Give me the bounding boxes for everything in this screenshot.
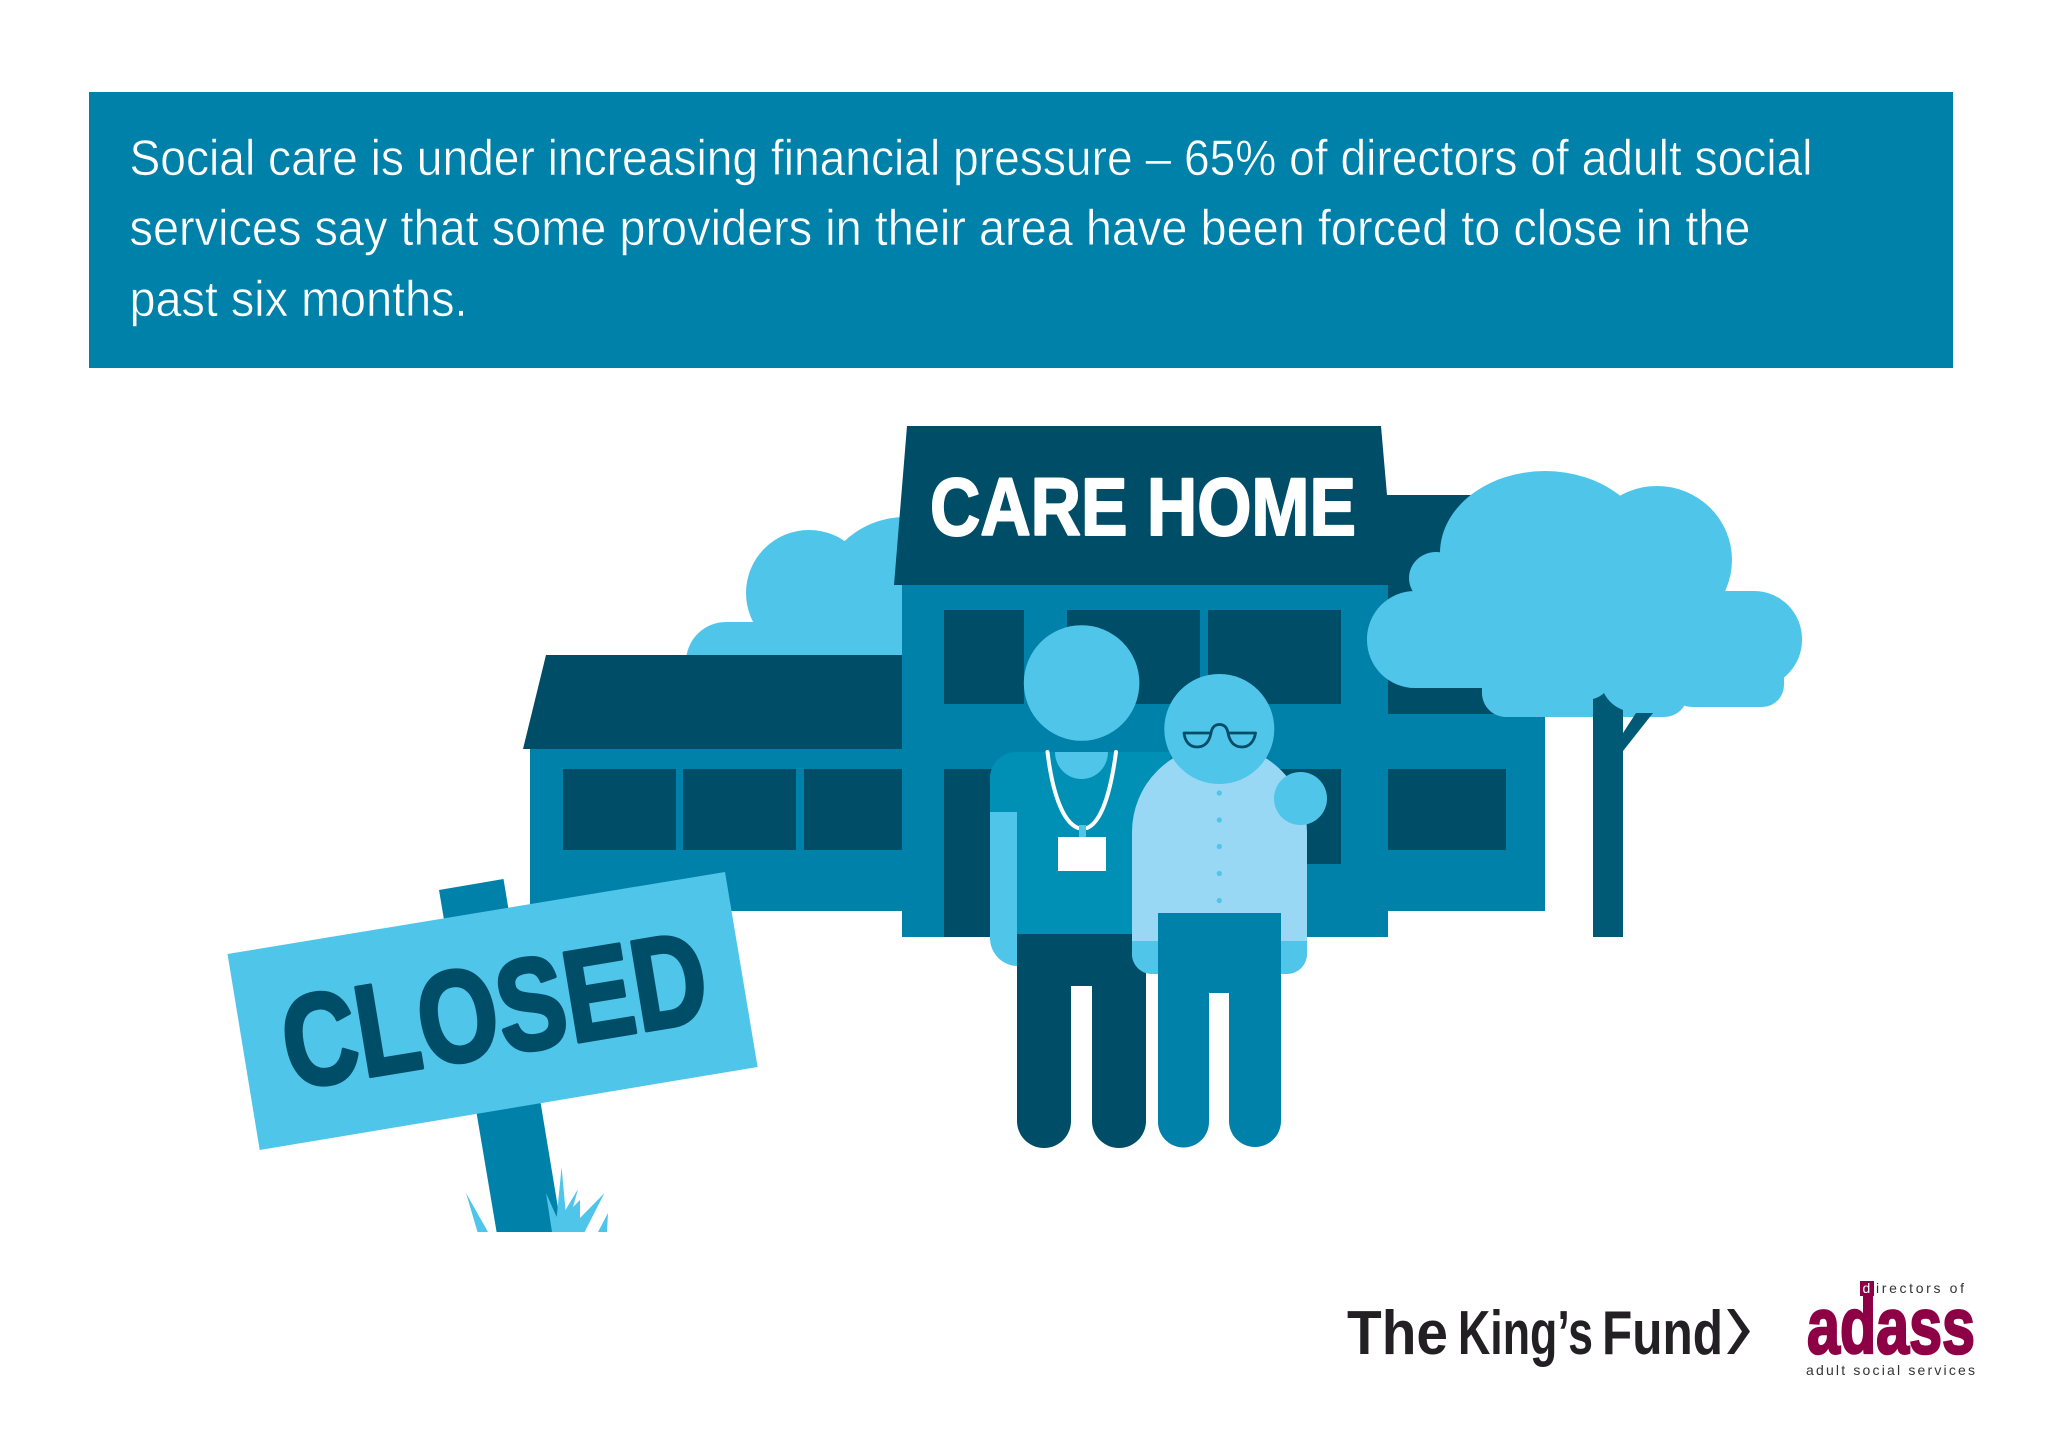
roof sign: CARE HOME (930, 462, 1356, 553)
worker arm (990, 812, 1017, 966)
logo: The King's Fund (1347, 1299, 1750, 1368)
worker neck (1055, 752, 1108, 779)
person shirt buttons (1217, 790, 1222, 903)
left wing (523, 655, 902, 911)
grass (466, 1167, 608, 1232)
text: headline statement: Social care is under increasing financial pressure – 65% of directors of adult social (130, 130, 1812, 186)
text: headline statement: services say that some providers in their area have been forced to close in the (130, 200, 1750, 256)
panel: headline banner (89, 92, 1953, 368)
logo: adass: adult social services (1806, 1362, 1975, 1378)
logo: adass (1806, 1280, 1975, 1378)
figure: older person (1132, 674, 1327, 1148)
illustration: care home building (523, 426, 1545, 937)
tree canopy (1367, 471, 1802, 717)
sign post (439, 879, 562, 1232)
worker legs (1017, 934, 1146, 1148)
text: headline statement (130, 130, 1812, 327)
sign board (228, 872, 758, 1150)
person trousers (1158, 913, 1281, 1148)
logo: The King's Fund: Fund (1602, 1299, 1723, 1368)
worker torso (990, 752, 1170, 934)
text: headline statement: past six months. (130, 271, 468, 327)
person glasses (1184, 724, 1256, 747)
person head (1164, 674, 1274, 784)
worker head (1024, 625, 1139, 741)
figure: care worker (990, 625, 1170, 1148)
sign text: CLOSED (271, 903, 717, 1117)
icon: cloud behind building (686, 517, 993, 702)
worker lanyard (1048, 752, 1116, 871)
icon: closed sign (228, 872, 758, 1232)
roof sign (894, 426, 1394, 585)
tree trunk (1593, 693, 1653, 937)
logo: adass: adass (1807, 1281, 1975, 1370)
main block (902, 585, 1388, 937)
logo: The King's Fund: The (1347, 1299, 1448, 1368)
right wing (1387, 495, 1545, 911)
logo: adass: d (1862, 1280, 1870, 1296)
person cuffs (1132, 941, 1307, 974)
person shirt (1132, 745, 1307, 974)
worker hand on shoulder (1274, 772, 1327, 825)
icon: tree (1367, 471, 1802, 937)
logo: The King's Fund: King’s (1458, 1299, 1593, 1368)
logo: adass: irectors of (1876, 1280, 1964, 1296)
